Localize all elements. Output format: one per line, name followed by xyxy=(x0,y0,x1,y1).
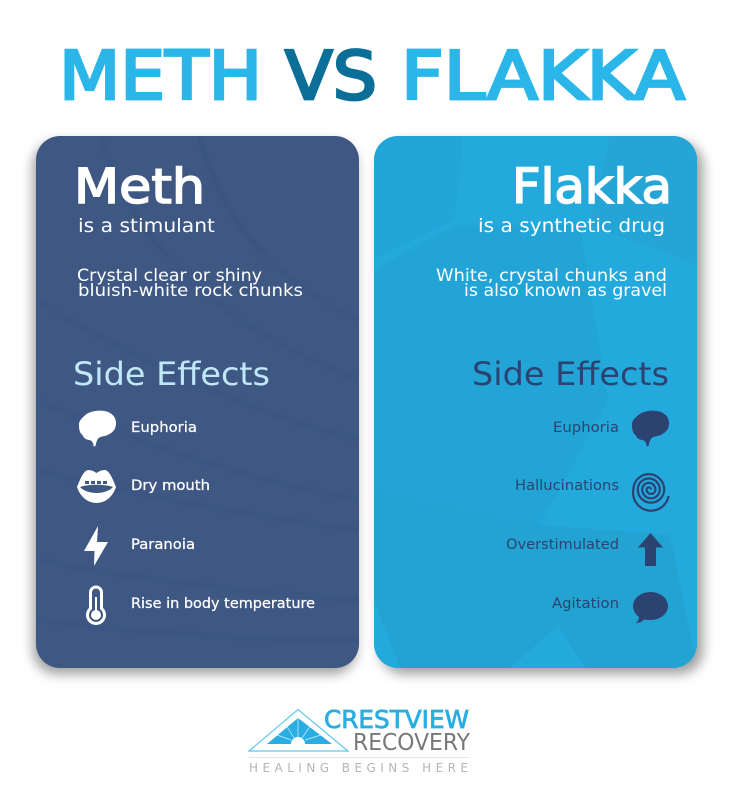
text: Overstimulated: Overstimulated xyxy=(506,537,619,553)
icon: spiral xyxy=(633,474,669,511)
text: description xyxy=(77,266,303,301)
logo xyxy=(249,705,471,775)
panel: meth xyxy=(33,136,359,674)
title: FLAKKA xyxy=(401,37,685,115)
text: description: bluish-white rock chunks xyxy=(78,281,303,301)
text: Agitation: Agitation xyxy=(552,596,619,612)
text: description: White, crystal chunks and xyxy=(436,266,667,286)
text: Rise in body temperature: Rise in body temperature xyxy=(131,596,315,612)
icon: lightning xyxy=(84,526,108,566)
text: RECOVERY: RECOVERY xyxy=(353,730,471,756)
divider xyxy=(249,757,470,758)
icon: brain xyxy=(79,411,116,446)
text: Euphoria: Euphoria xyxy=(131,420,197,436)
heading: side effects: Side Effects xyxy=(472,355,669,393)
text: Euphoria: Euphoria xyxy=(553,420,619,436)
icon: brain xyxy=(632,411,669,446)
icon: speech bubble xyxy=(633,592,668,623)
heading: Meth: Meth xyxy=(74,159,205,215)
title: METH xyxy=(59,37,262,115)
icon: mouth xyxy=(77,470,116,503)
text: description: is also known as gravel xyxy=(464,281,667,301)
text: description: Crystal clear or shiny xyxy=(77,266,262,286)
text: Paranoia: Paranoia xyxy=(131,537,195,553)
text: Hallucinations: Hallucinations xyxy=(515,478,619,494)
title xyxy=(59,37,685,115)
heading: side effects: Side Effects xyxy=(73,355,270,393)
icon: logo triangle xyxy=(249,710,348,751)
text: CRESTVIEW: CRESTVIEW xyxy=(324,705,469,734)
text: Dry mouth: Dry mouth xyxy=(131,478,210,494)
heading: Flakka: Flakka xyxy=(512,159,672,215)
text: tagline: HEALING BEGINS HERE xyxy=(249,761,468,775)
icon: thermometer xyxy=(87,587,104,623)
text: is a stimulant: is a stimulant xyxy=(78,215,215,237)
icon: arrow up xyxy=(638,533,663,566)
text: is a synthetic drug: is a synthetic drug xyxy=(478,215,665,237)
text: description xyxy=(436,266,667,301)
panel: flakka xyxy=(374,136,703,674)
title: VS xyxy=(285,37,377,115)
